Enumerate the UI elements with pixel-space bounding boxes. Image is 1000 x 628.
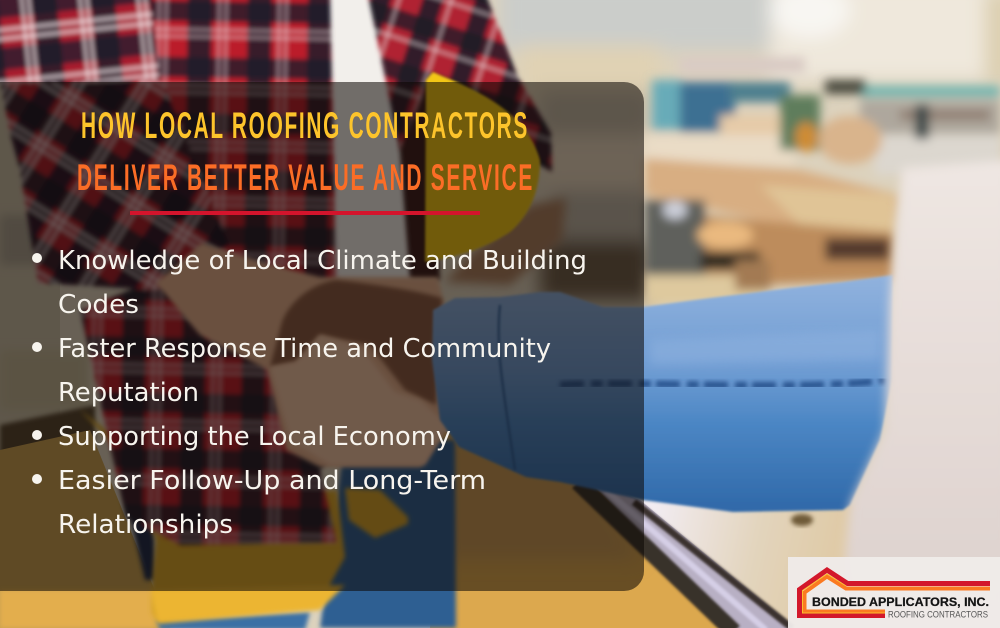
bullet 4: Relationships (58, 510, 233, 540)
jeans legs (124, 440, 456, 628)
company name: BONDED APPLICATORS, INC. (812, 595, 989, 609)
white undershirt (322, 0, 425, 300)
title (77, 105, 534, 198)
tool belt (80, 410, 408, 624)
dark translucent text panel (0, 82, 644, 591)
bullet 2: Faster Response Time and Community (58, 334, 551, 364)
tagline: ROOFING CONTRACTORS (888, 610, 988, 620)
title underline (130, 211, 480, 215)
blurred workshop on the right (500, 0, 1000, 305)
bullet 1 (32, 246, 587, 320)
table edge (578, 482, 860, 628)
title line 1: HOW LOCAL ROOFING CONTRACTORS (81, 105, 529, 146)
bullet 1: Codes (58, 290, 139, 320)
background on the left (0, 60, 95, 462)
plaid shirt (0, 0, 337, 545)
bullet 3: Supporting the Local Economy (58, 422, 451, 452)
dark edge beside undershirt (396, 70, 440, 280)
denim sleeve (432, 275, 893, 512)
logo: Bonded Applicators (788, 557, 1000, 628)
bullet 4 (32, 466, 486, 540)
white shirt on the right (845, 160, 1000, 628)
title line 2: DELIVER BETTER VALUE AND SERVICE (77, 157, 534, 198)
floor (0, 430, 760, 628)
bullet 1: Knowledge of Local Climate and Building (58, 246, 587, 276)
bullet 4: Easier Follow-Up and Long-Term (58, 466, 486, 496)
hard hat (425, 72, 540, 262)
bullet list (32, 246, 587, 540)
bullet 2 (32, 334, 551, 408)
bullet 2: Reputation (58, 378, 199, 408)
hand under hard hat (445, 198, 566, 285)
plaid shoulder (368, 0, 552, 172)
arms and clasped hands (156, 243, 450, 467)
icon: roof outline (800, 570, 990, 616)
